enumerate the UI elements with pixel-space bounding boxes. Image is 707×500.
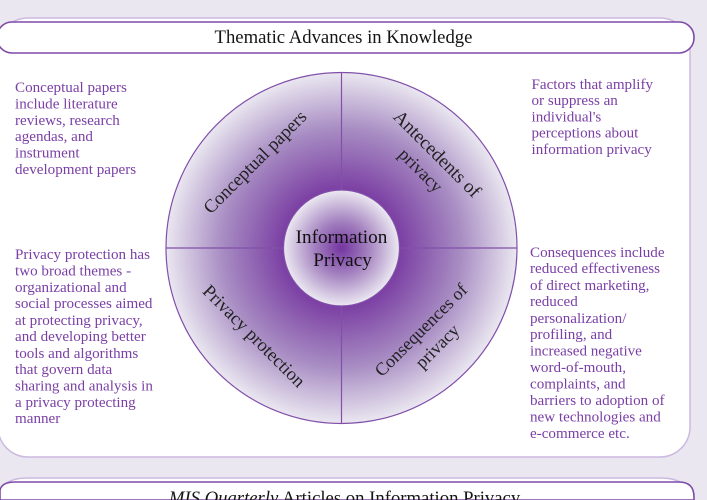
text: conceptual papers description: development papers	[15, 162, 136, 178]
text: conceptual papers description: instrument	[15, 146, 80, 162]
segment label: consequences of privacy: privacy	[411, 320, 463, 372]
text: privacy protection description: at protecting privacy,	[15, 313, 143, 329]
segment label: antecedents of privacy: privacy	[395, 144, 447, 196]
header: thematic advances: Thematic Advances in Knowledge	[215, 27, 472, 48]
segment label: privacy protection: Privacy protection	[198, 282, 308, 392]
text: consequences description: barriers to adoption of	[530, 393, 666, 409]
header: MIS Quarterly articles	[0, 482, 694, 500]
text: consequences description: Consequences include	[530, 245, 665, 261]
text: privacy protection description: Privacy protection has	[15, 247, 150, 263]
text: consequences description: personalization/	[530, 311, 627, 327]
centre circle: information privacy: Privacy	[313, 250, 372, 271]
segment label: antecedents of privacy: Antecedents of	[389, 106, 485, 203]
text: conceptual papers description: reviews, research	[15, 113, 120, 129]
text: consequences description: profiling, and	[530, 327, 613, 343]
text: consequences description: word-of-mouth,	[530, 360, 626, 376]
text: privacy protection description: two broad themes -	[15, 264, 131, 280]
text: antecedents description: individual's	[532, 110, 601, 126]
text: antecedents description: or suppress an	[532, 93, 618, 109]
text: conceptual papers description: include literature	[15, 96, 118, 112]
text: consequences description: complaints, and	[530, 376, 626, 392]
segment label: conceptual papers: Conceptual papers	[200, 107, 311, 218]
centre circle: information privacy	[284, 190, 400, 306]
text: privacy protection description: a privacy protecting	[15, 395, 136, 411]
text: antecedents description: Factors that amplify	[532, 77, 654, 93]
text: privacy protection description: tools and algorithms	[15, 346, 138, 362]
panel: MIS Quarterly articles	[0, 478, 694, 500]
text: consequences description: reduced	[530, 294, 578, 310]
text: privacy protection description: sharing and analysis in	[15, 378, 153, 394]
text: privacy protection description: that govern data	[15, 362, 113, 378]
text: consequences description: of direct marketing,	[530, 278, 649, 294]
text: consequences description: reduced effectiveness	[530, 261, 660, 277]
outer ring	[166, 72, 517, 424]
centre circle: information privacy: Information	[296, 227, 388, 248]
text: privacy protection description: manner	[15, 411, 60, 427]
text: conceptual papers description: Conceptual papers	[15, 80, 127, 96]
text: conceptual papers description: agendas, and	[15, 129, 93, 145]
text: antecedents description: information privacy	[532, 142, 652, 158]
text: consequences description: increased negative	[530, 344, 642, 360]
text: privacy protection description: organizational and	[15, 280, 127, 296]
text: antecedents description: perceptions about	[532, 126, 639, 142]
text: consequences description: new technologies and	[530, 410, 661, 426]
text: privacy protection description: and developing better	[15, 329, 146, 345]
text: privacy protection description: social processes aimed	[15, 296, 153, 312]
text: consequences description: e-commerce etc.	[530, 426, 630, 442]
diagram: information privacy wheel	[166, 72, 517, 424]
header: thematic advances	[0, 22, 694, 53]
segment label: consequences of privacy: Consequences of	[371, 280, 471, 380]
